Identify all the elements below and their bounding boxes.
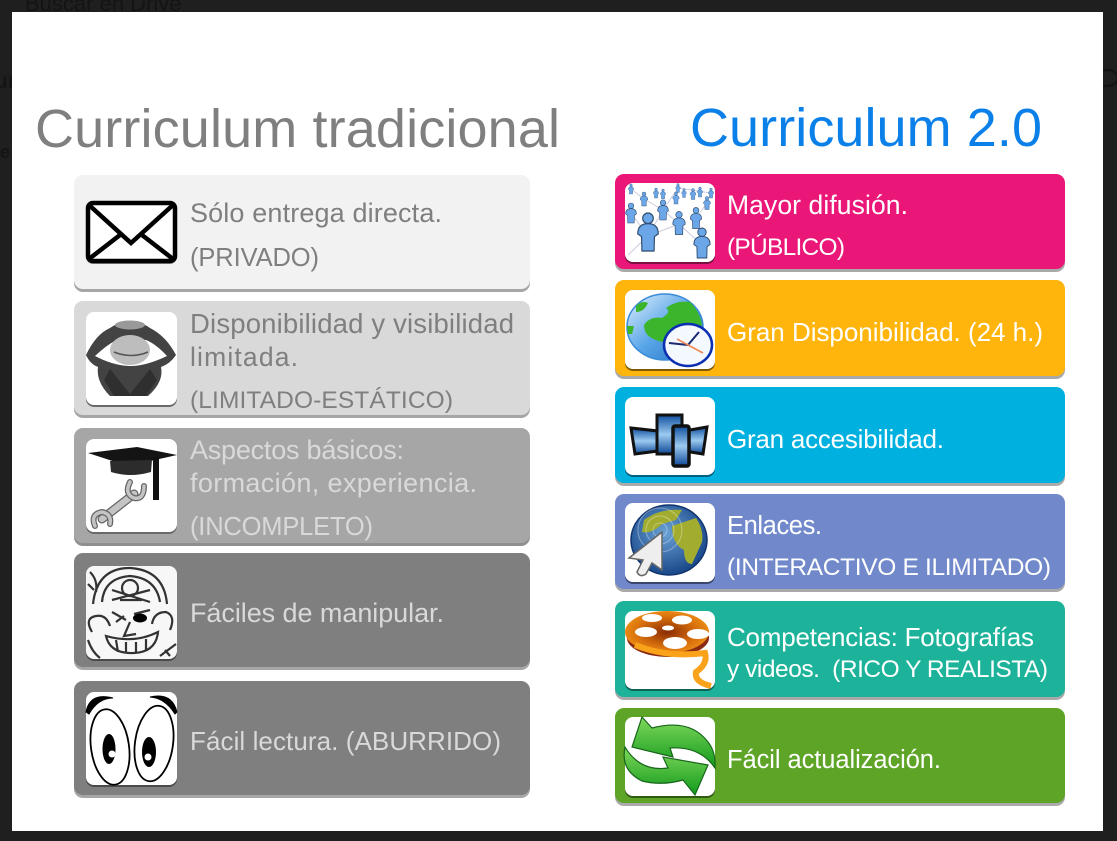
card text [190,198,442,272]
card text [727,622,1048,683]
icon: graduation cap and wrench [86,439,177,534]
card text: Disponibilidad y visibilidad [190,308,514,339]
card text: Enlaces. [727,512,822,540]
icon: envelope [86,203,177,264]
card: wider diffusion [615,174,1065,272]
panel: traditional curriculum list [74,175,530,798]
card text: Competencias: Fotografías [727,622,1034,652]
card: basic aspects [74,428,530,546]
card text: (LIMITADO-ESTÁTICO) [190,387,453,414]
card: easy update [615,708,1065,806]
icon: hiding figure [86,312,177,407]
card text: formación, experiencia. [190,468,477,498]
card text [190,435,477,541]
card: great accessibility [615,387,1065,486]
card text: (PRIVADO) [190,244,319,272]
card: skills photos and videos [615,601,1065,700]
icon: cartoon eyes [86,692,178,787]
title: Curriculum tradicional: Curriculum tradicional [35,99,560,159]
card: easy to manipulate [74,553,530,670]
icon: refresh arrows [624,717,715,798]
icon: globe and clock [625,290,715,371]
card text: y videos. (RICO Y REALISTA) [727,656,1048,683]
card: easy reading [74,681,530,798]
icon: globe with cursor [625,503,715,584]
card text [727,512,1051,581]
icon: mobile devices [625,397,715,477]
card: links [615,494,1065,592]
card text: (INTERACTIVO E ILIMITADO) [727,554,1051,581]
card text: Fácil actualización. [727,746,941,774]
card text [190,308,514,414]
card text: Gran accesibilidad. [727,424,944,454]
icon: film reel [625,611,715,691]
icon: pirate drawing [86,566,177,661]
title: Curriculum 2.0: Curriculum 2.0 [690,98,1042,158]
card text: (INCOMPLETO) [190,513,373,541]
card text: Fácil lectura. (ABURRIDO) [190,726,501,756]
panel: curriculum 2.0 list [615,174,1065,806]
card: limited availability [74,301,530,418]
card text: Fáciles de manipular. [190,598,444,628]
card text: Gran Disponibilidad. (24 h.) [727,317,1043,347]
card text: Sólo entrega directa. [190,198,442,228]
card text [727,190,908,261]
icon: network of people [625,183,715,264]
card text: limitada. [190,342,298,372]
card: direct delivery [74,175,530,292]
card: great availability [615,280,1065,379]
card text: (PÚBLICO) [727,234,845,261]
card text: Mayor difusión. [727,190,908,220]
card text: Aspectos básicos: [190,435,404,465]
